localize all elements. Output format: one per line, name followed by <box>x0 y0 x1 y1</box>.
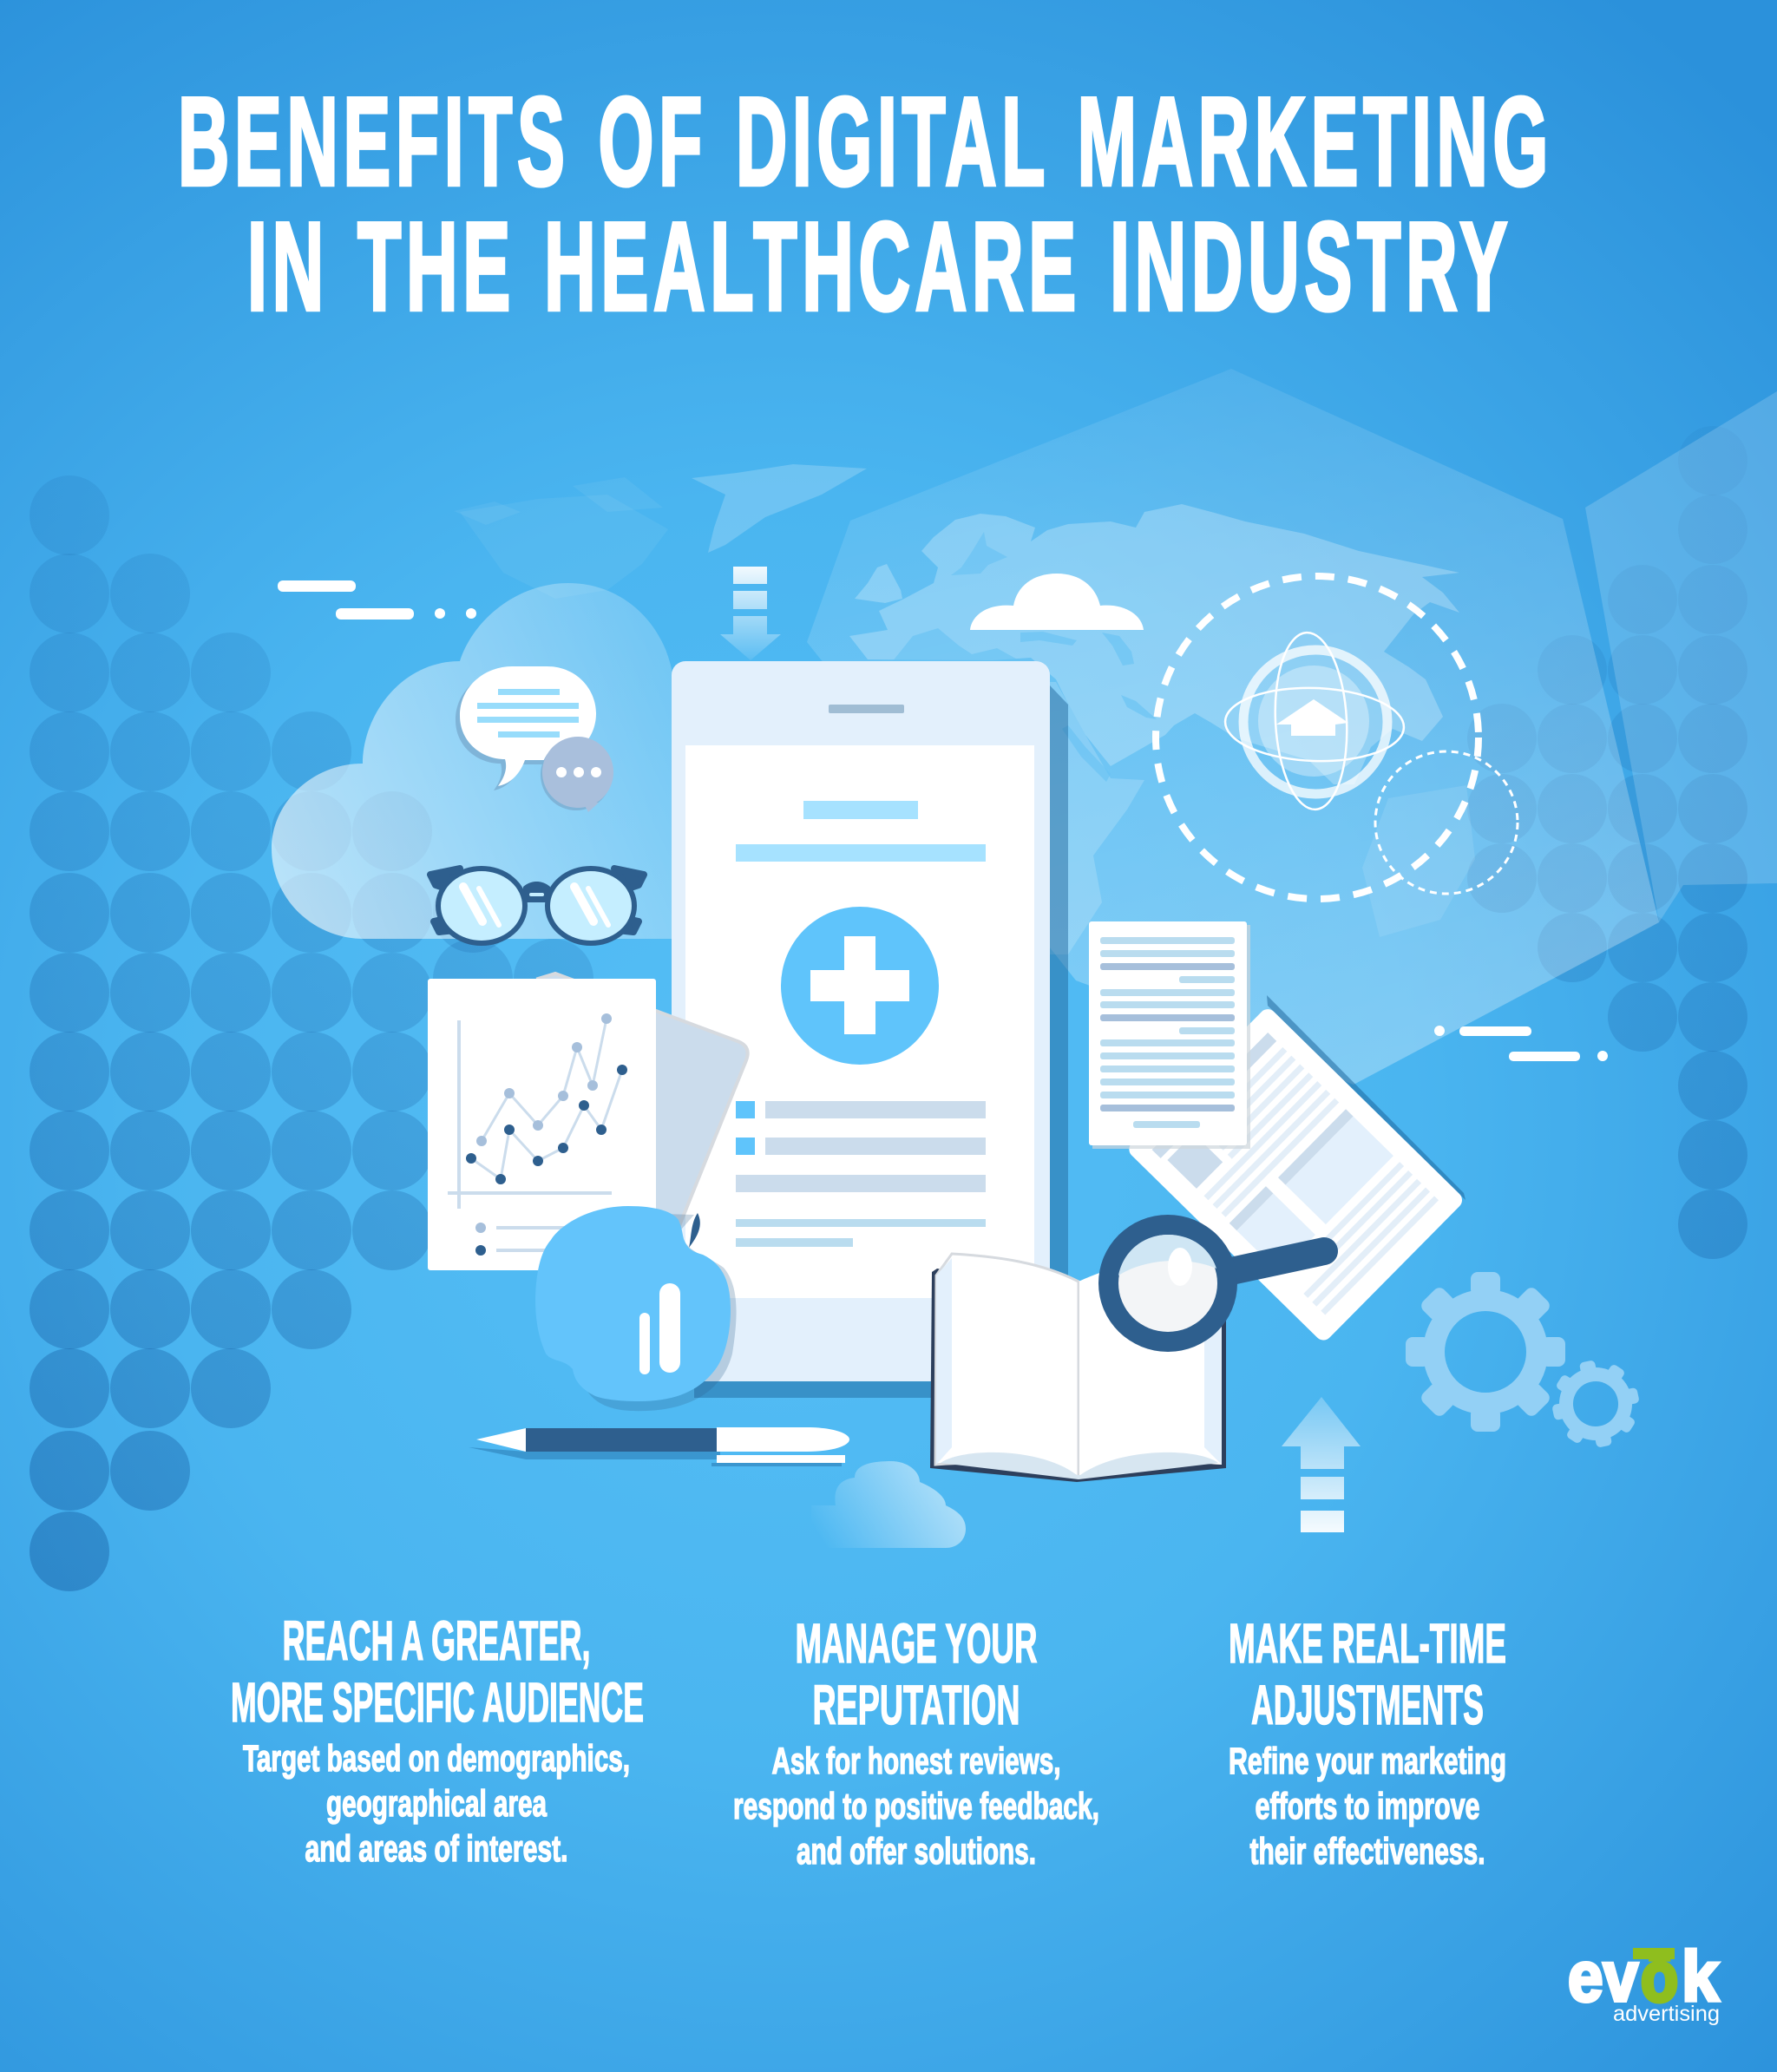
globe <box>1224 631 1405 811</box>
body text <box>1229 1741 1506 1872</box>
column: manage reputation <box>733 1612 1099 1872</box>
map: North America <box>454 477 668 599</box>
right page <box>1079 1254 1222 1477</box>
heading: REACH A GREATER, <box>283 1610 590 1672</box>
decorative dashes top left <box>278 580 476 620</box>
medical cross badge <box>781 907 939 1065</box>
white bubble <box>460 666 596 786</box>
logo: evok advertising <box>1568 1938 1720 2026</box>
newspaper sheet <box>1125 1006 1466 1344</box>
body text <box>243 1738 630 1870</box>
logo: evok advertising: k <box>1682 1938 1719 2016</box>
map: inland seas <box>892 532 1157 782</box>
large gear <box>1406 1272 1565 1432</box>
icon: magnifying glass <box>1098 1215 1324 1352</box>
phone shadow <box>694 685 1068 1398</box>
line series light <box>476 1013 612 1146</box>
lens highlights <box>463 887 593 921</box>
column: reach audience <box>231 1610 644 1870</box>
left page <box>935 1254 1079 1477</box>
phone speaker <box>829 705 904 713</box>
icon: open book <box>930 1254 1226 1482</box>
left column stripes <box>1170 1047 1339 1217</box>
apple bars <box>639 1313 650 1374</box>
apple body <box>535 1206 731 1401</box>
map: Eurasia <box>849 504 1459 784</box>
heading <box>1229 1612 1506 1736</box>
chart paper <box>428 979 656 1270</box>
phone screen <box>685 745 1034 1298</box>
icon: up arrow <box>1282 1397 1361 1532</box>
map: Africa <box>1050 682 1144 954</box>
body text: respond to positive feedback, <box>733 1786 1099 1827</box>
grey bubble <box>541 739 612 810</box>
logo: evok advertising: ev <box>1568 1938 1638 2016</box>
glasses bridge <box>523 882 550 902</box>
logo: evok advertising: advertising <box>1613 2002 1720 2026</box>
icon: apple with bars <box>535 1206 737 1411</box>
map: Greenland <box>692 464 867 553</box>
chart document <box>428 974 748 1293</box>
tilted back card <box>538 974 748 1293</box>
icon: left translucent cloud <box>272 583 674 939</box>
newspaper shadow <box>1267 995 1466 1200</box>
large dashed ring <box>1156 576 1479 899</box>
body text: Refine your marketing <box>1229 1741 1506 1782</box>
world map <box>454 464 1475 954</box>
icon: white cloud <box>970 574 1144 630</box>
small dashed ring <box>1375 751 1518 894</box>
book cover <box>930 1269 1226 1482</box>
icon: bottom cloud <box>811 1461 966 1548</box>
glasses temples <box>430 869 644 932</box>
map: British Isles <box>855 564 902 603</box>
column: real-time adjustments <box>1229 1612 1506 1872</box>
light hexagon panels <box>807 369 1777 1085</box>
photo blocks <box>1278 1109 1354 1185</box>
body text <box>733 1741 1099 1872</box>
body text: and offer solutions. <box>797 1831 1036 1872</box>
body text: their effectiveness. <box>1249 1831 1485 1872</box>
left dot pattern <box>30 475 593 1591</box>
right column stripes <box>1286 1162 1439 1315</box>
decorative dashes right <box>1434 1026 1608 1061</box>
chart legend <box>475 1223 574 1256</box>
right text document <box>1089 921 1250 1149</box>
body text: Target based on demographics, <box>243 1738 630 1780</box>
small gear <box>1544 1353 1647 1455</box>
line series dark <box>466 1065 627 1184</box>
heading <box>795 1612 1038 1736</box>
logo: evok advertising: ō <box>1641 1938 1678 2016</box>
heading: MAKE REAL-TIME <box>1229 1612 1506 1675</box>
apple shadow <box>573 1212 737 1411</box>
body text: Ask for honest reviews, <box>772 1741 1060 1782</box>
body text: and areas of interest. <box>305 1828 567 1870</box>
heading: MORE SPECIFIC AUDIENCE <box>231 1671 644 1734</box>
icon: gears <box>1406 1272 1647 1455</box>
icon: newspaper <box>1125 995 1466 1344</box>
title <box>178 71 1553 337</box>
body text: geographical area <box>326 1783 548 1825</box>
left column block <box>1152 1033 1276 1158</box>
heading: ADJUSTMENTS <box>1251 1674 1484 1736</box>
apple stem <box>689 1213 700 1248</box>
heading: MANAGE YOUR <box>795 1612 1038 1675</box>
screen list rows <box>736 1101 986 1247</box>
icon: glasses <box>430 869 644 943</box>
screen heading bars <box>736 801 986 862</box>
heading <box>231 1610 644 1734</box>
page edges <box>941 1452 1218 1479</box>
globe target <box>1156 576 1518 899</box>
icon: down arrow <box>720 567 781 660</box>
icon: pen <box>469 1427 849 1466</box>
chart axes <box>448 1020 612 1209</box>
white bubble shadow <box>456 671 592 790</box>
heading: REPUTATION <box>812 1674 1020 1736</box>
map: Australia <box>1362 785 1475 937</box>
right dot pattern <box>1467 426 1747 1259</box>
icon: speech bubbles <box>456 666 613 812</box>
glasses lenses <box>438 869 525 943</box>
phone body <box>672 661 1050 1381</box>
phone <box>672 661 1068 1398</box>
body text: efforts to improve <box>1255 1786 1480 1827</box>
